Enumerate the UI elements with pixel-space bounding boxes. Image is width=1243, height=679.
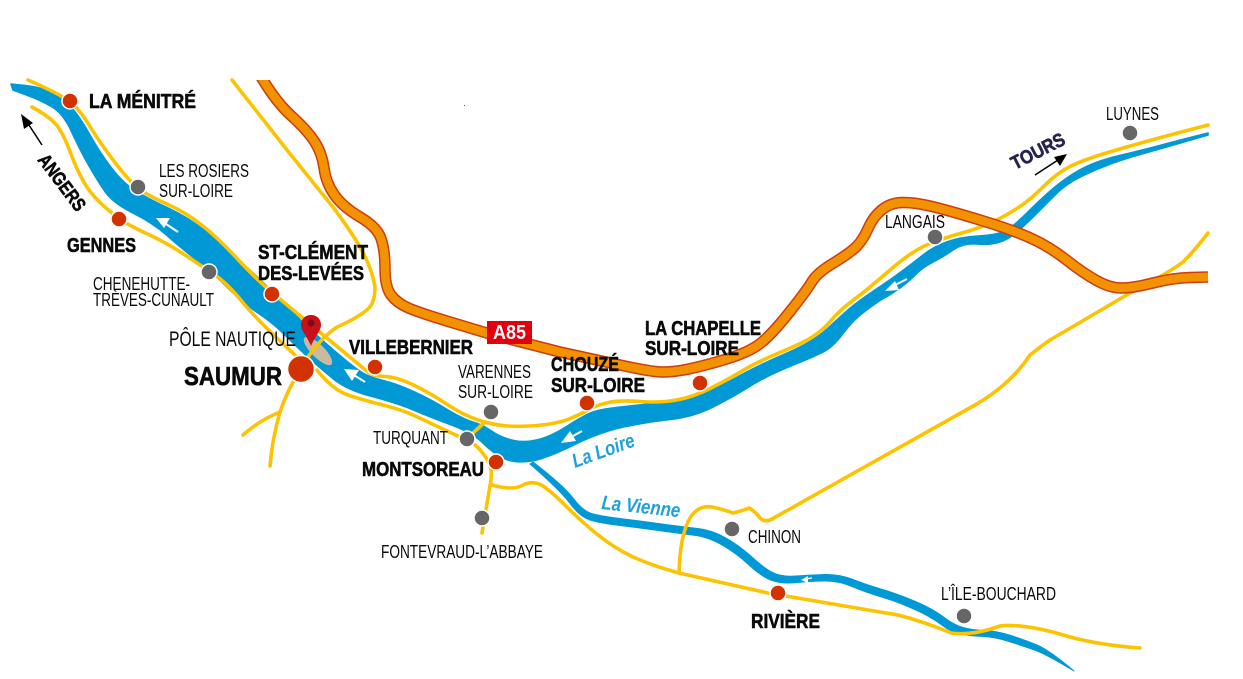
bold town labels: LA MÉNITRÉ: [89, 90, 196, 113]
town markers: secondary stops: [130, 125, 1138, 624]
bold town labels: CHOUZÉ: [551, 353, 619, 376]
direction: Angers: ANGERS: [33, 150, 89, 216]
regular town labels: SUR-LOIRE: [458, 382, 533, 402]
regular town labels: CHINON: [748, 527, 801, 547]
bold town labels: LA CHAPELLE: [645, 317, 761, 340]
regular town labels: TRÈVES-CUNAULT: [93, 290, 214, 310]
direction: Angers: [21, 114, 89, 216]
river: La Vienne: [530, 462, 1074, 671]
river label: La Vienne: La Vienne: [600, 492, 681, 522]
flow arrows on the rivers: [156, 218, 907, 583]
river: La Loire: [11, 84, 1208, 462]
bold town labels: SAUMUR: [184, 361, 282, 391]
regular town labels: VARENNES: [458, 362, 531, 382]
bold town labels: SUR-LOIRE: [551, 374, 645, 397]
bold town labels: MONTSOREAU: [362, 458, 484, 481]
river label: La Loire: La Loire: [569, 430, 638, 473]
regular town labels: TURQUANT: [373, 428, 448, 448]
motorway badge: A85: A85: [493, 322, 526, 344]
pin: pôle nautique: [301, 315, 321, 346]
regular town labels: LES ROSIERS: [159, 161, 249, 181]
motorway A85: [257, 70, 1208, 372]
regular town labels: LUYNES: [1106, 104, 1159, 124]
bold town labels: DES-LEVÉES: [258, 262, 364, 285]
regular town labels: PÔLE NAUTIQUE: [169, 328, 296, 351]
town markers: main stops: [62, 93, 786, 601]
island: pôle nautique: [300, 333, 336, 369]
road network: [28, 80, 1208, 648]
direction: Tours: TOURS: [1008, 129, 1069, 174]
bold town labels: RIVIÈRE: [751, 610, 820, 633]
regular town labels: FONTEVRAUD-L’ABBAYE: [381, 542, 543, 562]
regular town labels: SUR-LOIRE: [159, 181, 233, 201]
bold town labels: ST-CLÉMENT: [258, 241, 368, 264]
regular town labels: LANGAIS: [885, 212, 945, 232]
regular town labels: L’ÎLE-BOUCHARD: [941, 584, 1056, 604]
regular town labels: CHENEHUTTE-: [93, 274, 190, 294]
regular town labels: [93, 104, 1159, 604]
bold town labels: GENNES: [67, 234, 136, 257]
bold town labels: SUR-LOIRE: [645, 337, 739, 360]
bold town labels: [67, 90, 820, 633]
bold town labels: VILLEBERNIER: [349, 336, 473, 359]
